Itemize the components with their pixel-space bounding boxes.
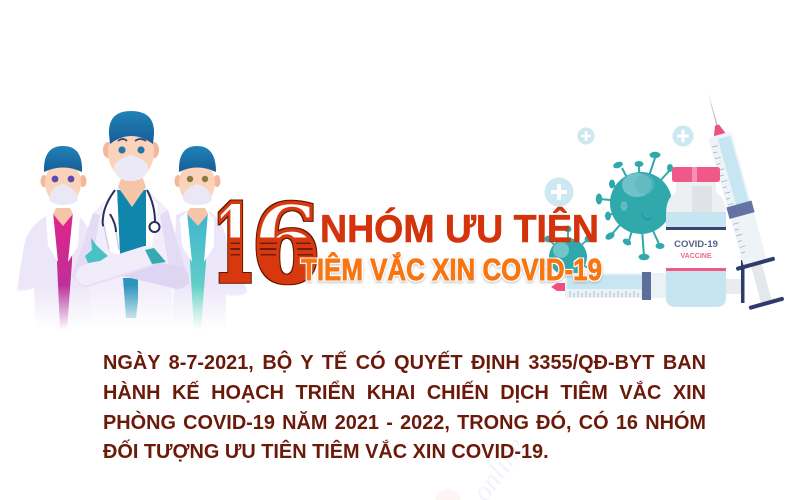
icon: horizontal syringe — [551, 260, 744, 303]
doctor: right — [172, 146, 247, 330]
vial label: COVID-19: COVID-19 — [674, 239, 718, 250]
watermark — [435, 432, 532, 500]
text block: introduction: HÀNH KẾ HOẠCH TRIỂN KHAI CHIẾN DỊCH TIÊM VẮC XIN — [103, 382, 706, 404]
icon: small virus — [546, 226, 592, 276]
illustration: three doctors — [17, 111, 247, 330]
title: number 16: 6 — [252, 181, 320, 306]
title: number 16 — [212, 181, 320, 306]
illustration: vaccine and virus — [544, 87, 786, 311]
text block: introduction — [103, 350, 706, 463]
text block: introduction: NGÀY 8-7-2021, BỘ Y TẾ CÓ QUYẾT ĐỊNH 3355/QĐ-BYT BAN — [103, 352, 706, 374]
text block: introduction: ĐỐI TƯỢNG ƯU TIÊN TIÊM VẮC XIN COVID-19. — [103, 441, 549, 463]
text block: introduction: PHÒNG COVID-19 NĂM 2021 - 2022, TRONG ĐÓ, CÓ 16 NHÓM — [103, 412, 706, 434]
title: NHÓM ƯU TIÊN: NHÓM ƯU TIÊN — [320, 207, 599, 251]
icon: vaccine vial — [666, 167, 726, 307]
doctor: left — [17, 146, 95, 330]
icon: vertical syringe — [689, 87, 786, 311]
doctor: center — [72, 111, 190, 330]
vial label: VACCINE: VACCINE — [681, 253, 712, 260]
subtitle: TIÊM VẮC XIN COVID-19: TIÊM VẮC XIN COVID-19 — [301, 251, 602, 287]
arms crossed — [86, 256, 178, 278]
title: number 16: 1 — [212, 181, 256, 306]
icon: plus bubbles — [544, 126, 694, 206]
icon: large virus — [596, 152, 673, 260]
